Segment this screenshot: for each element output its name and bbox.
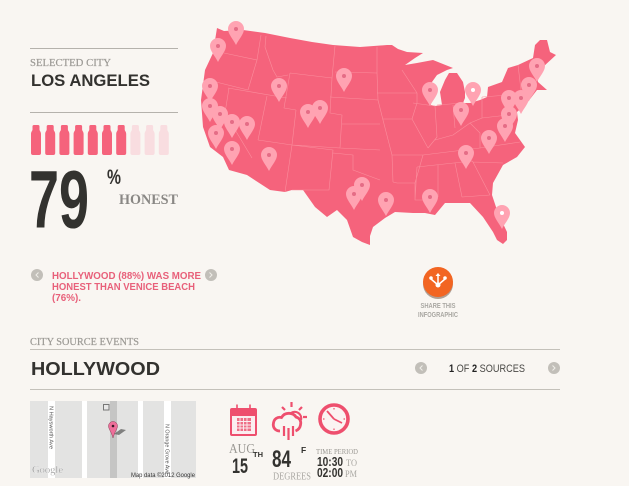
event temperature: F	[301, 445, 306, 455]
statistic: 79% honest: HONEST	[119, 192, 178, 208]
state borders	[208, 35, 530, 200]
fact carousel: HOLLYWOOD (88%) WAS MORE	[52, 271, 201, 282]
event date: 15	[232, 455, 248, 478]
event temperature: 84	[272, 446, 291, 473]
fact carousel: (76%).	[52, 293, 81, 304]
heading: selected city	[30, 57, 150, 90]
map pins	[202, 21, 545, 229]
fact carousel: HONEST THAN VENICE BEACH	[52, 282, 195, 293]
event date	[229, 442, 263, 478]
street map thumbnail: N Haysworth Ave	[48, 406, 54, 449]
fact carousel	[31, 269, 217, 304]
event date: TH	[253, 452, 263, 459]
source pager	[415, 362, 560, 375]
event time period: 02:00	[317, 465, 343, 480]
event temperature: DEGREES	[273, 472, 311, 482]
share button	[418, 267, 458, 319]
heading: selected city: SELECTED CITY	[30, 57, 111, 69]
icon: calendar	[231, 404, 256, 435]
section heading: city source events: CITY SOURCE EVENTS	[30, 336, 139, 348]
event temperature	[272, 445, 311, 482]
statistic: 79% honest	[29, 154, 178, 246]
event date: AUG	[229, 442, 255, 457]
event time period: 10:30	[317, 454, 343, 469]
statistic: 79% honest: %	[107, 166, 121, 189]
event time period: TIME PERIOD	[316, 448, 358, 456]
street map thumbnail: Map data ©2012 Google	[131, 472, 196, 479]
map: United States	[201, 28, 556, 245]
event time period	[316, 448, 358, 480]
share button: INFOGRAPHIC	[418, 312, 458, 319]
section heading: city source events	[30, 336, 560, 390]
street map thumbnail: Google	[32, 464, 63, 476]
icon: cloud, sun and rain	[273, 402, 307, 440]
source pager: 1 OF 2 SOURCES	[449, 363, 525, 375]
heading: selected city: LOS ANGELES	[31, 72, 150, 90]
event time period: PM	[345, 469, 357, 479]
street map thumbnail: N Orange Grove Ave	[164, 424, 170, 474]
street map thumbnail	[30, 401, 196, 479]
icon: clock	[320, 405, 348, 433]
section heading: city source events: HOLLYWOOD	[31, 359, 160, 379]
event time period: TO	[346, 458, 357, 468]
share button: SHARE THIS	[420, 303, 456, 310]
bottle pictogram: 7 of 10	[31, 125, 169, 155]
statistic: 79% honest: 79	[29, 154, 89, 246]
